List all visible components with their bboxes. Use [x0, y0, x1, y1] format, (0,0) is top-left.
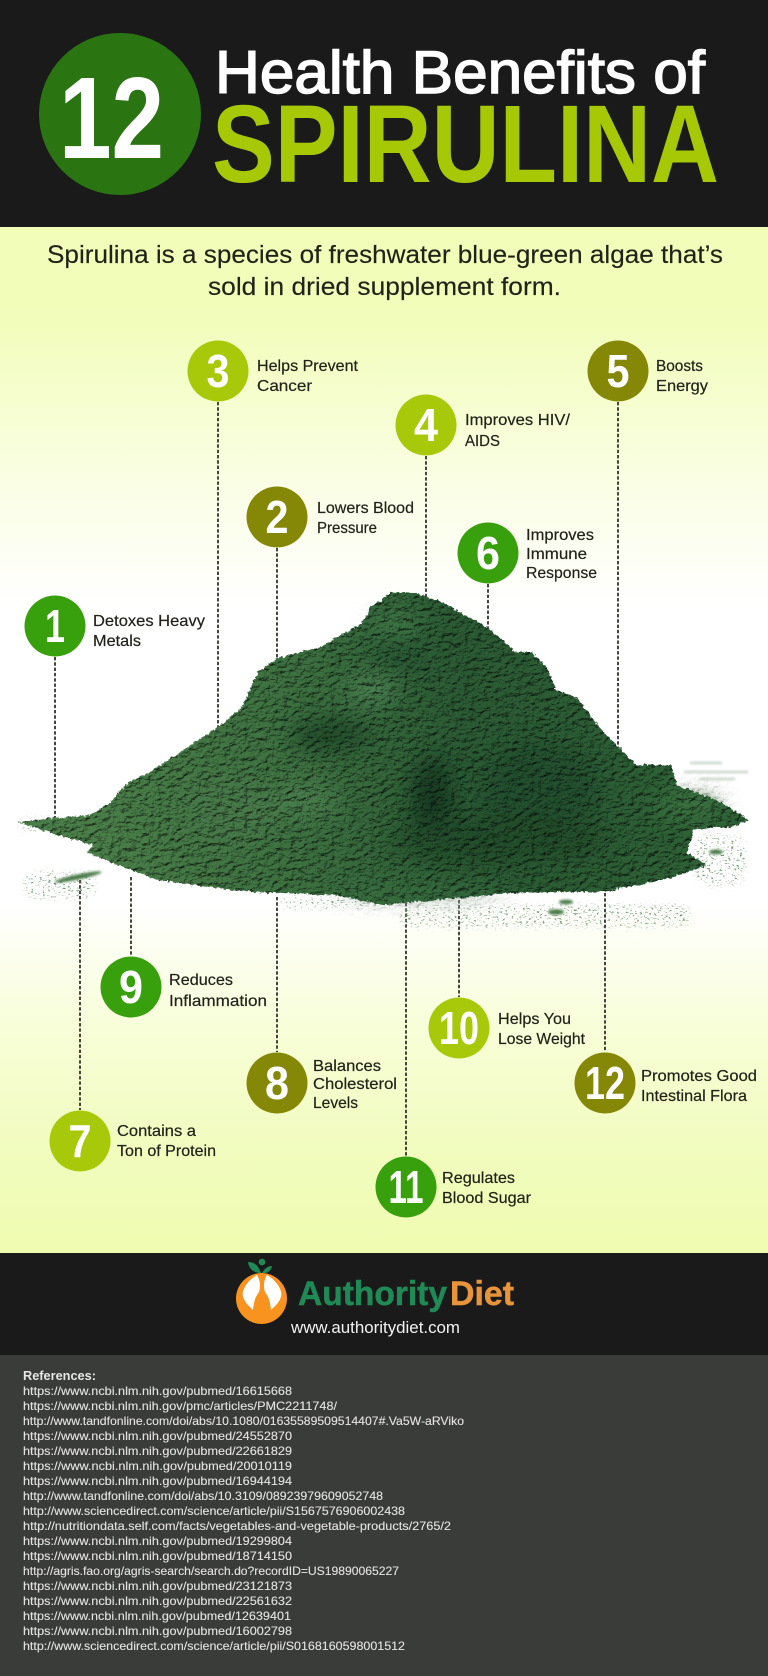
references list: https://www.ncbi.nlm.nih.gov/pubmed/16615668 — [23, 1384, 292, 1398]
logo wordmark: Authority: Authority — [298, 1275, 447, 1313]
benefit 12 — [574, 1052, 757, 1114]
references list: http://agris.fao.org/agris-search/search.do?recordID=US19890065227 — [23, 1564, 399, 1578]
benefit 9: 9 — [119, 961, 143, 1013]
benefit 6: 6 — [476, 527, 500, 579]
references list: http://www.tandfonline.com/doi/abs/10.3109/08923979609052748 — [23, 1489, 383, 1503]
benefit 5: Boosts — [656, 358, 703, 375]
benefit 4: Improves HIV/ — [465, 412, 571, 429]
intro text: sold in dried supplement form. — [208, 273, 561, 301]
benefit 11: Blood Sugar — [442, 1190, 532, 1207]
logo wordmark: Diet: Diet — [450, 1275, 514, 1313]
connector lines — [55, 402, 618, 1157]
benefit 1: Detoxes Heavy — [93, 613, 205, 630]
references list: http://www.sciencedirect.com/science/article/pii/S0168160598001512 — [23, 1639, 405, 1653]
references panel — [0, 1355, 768, 1676]
benefit 3: 3 — [206, 345, 230, 397]
benefit 3: Cancer — [257, 378, 313, 395]
benefit 8: Levels — [313, 1095, 358, 1112]
benefit 9: Reduces — [169, 972, 233, 989]
background panel — [0, 227, 768, 1253]
benefit 2 — [246, 486, 414, 548]
intro text: Spirulina is a species of freshwater blue-green algae that’s — [47, 241, 723, 269]
references list — [23, 1384, 464, 1653]
title line: Health Benefits of: Health Benefits of — [215, 39, 705, 106]
spirulina powder scatter — [20, 818, 745, 927]
badge: 12 — [39, 33, 201, 195]
benefit 9: Inflammation — [169, 993, 267, 1010]
benefit 6 — [458, 522, 597, 584]
references list: http://nutritiondata.self.com/facts/vegetables-and-vegetable-products/2765/2 — [23, 1519, 451, 1533]
benefit 6: Response — [526, 565, 597, 582]
benefit 5: 5 — [606, 345, 630, 397]
benefit 8: Balances — [313, 1058, 381, 1075]
benefit 9 — [100, 956, 267, 1018]
references list: https://www.ncbi.nlm.nih.gov/pubmed/23121873 — [23, 1579, 292, 1593]
references list: https://www.ncbi.nlm.nih.gov/pubmed/16944194 — [23, 1474, 292, 1488]
benefit 10: Lose Weight — [498, 1031, 586, 1048]
spirulina powder pile — [18, 592, 749, 905]
benefit 10: 10 — [439, 1002, 479, 1054]
header band — [0, 0, 768, 227]
benefit 12: Intestinal Flora — [641, 1088, 747, 1105]
intro text — [47, 241, 723, 301]
benefit 7 — [50, 1110, 216, 1172]
benefit 6: Improves — [526, 527, 594, 544]
benefit 4 — [396, 394, 571, 456]
benefit 1: Metals — [93, 633, 141, 650]
benefit 1 — [24, 596, 205, 656]
references list: http://www.tandfonline.com/doi/abs/10.1080/01635589509514407#.Va5W-aRViko — [23, 1414, 464, 1428]
footer band — [0, 1253, 768, 1355]
benefit 2: Lowers Blood — [317, 500, 414, 517]
references list: https://www.ncbi.nlm.nih.gov/pubmed/22661829 — [23, 1444, 292, 1458]
benefit 10 — [428, 998, 586, 1058]
references list: https://www.ncbi.nlm.nih.gov/pmc/articles/PMC2211748/ — [23, 1399, 338, 1413]
benefit 5 — [588, 340, 708, 402]
loose powder clumps — [54, 763, 748, 915]
benefit 2: 2 — [266, 491, 288, 543]
icon: Authority Diet logo — [236, 1259, 287, 1324]
website url: www.authoritydiet.com — [290, 1318, 460, 1337]
benefit 4: AIDS — [465, 433, 500, 450]
references list: https://www.ncbi.nlm.nih.gov/pubmed/18714150 — [23, 1549, 292, 1563]
benefit 4: 4 — [414, 399, 438, 451]
benefit 5: Energy — [656, 378, 708, 395]
benefit 7: Ton of Protein — [117, 1143, 216, 1160]
references heading: References: — [23, 1369, 96, 1383]
benefit 3 — [188, 340, 359, 402]
benefit 7: 7 — [68, 1115, 92, 1167]
benefit 11 — [376, 1156, 532, 1218]
references list: https://www.ncbi.nlm.nih.gov/pubmed/22561632 — [23, 1594, 292, 1608]
benefit 3: Helps Prevent — [257, 358, 359, 375]
benefit 1: 1 — [45, 600, 65, 652]
benefit 12: Promotes Good — [641, 1068, 757, 1085]
benefit 8: 8 — [265, 1057, 289, 1109]
references list: http://www.sciencedirect.com/science/article/pii/S1567576906002438 — [23, 1504, 405, 1518]
references list: https://www.ncbi.nlm.nih.gov/pubmed/24552870 — [23, 1429, 292, 1443]
benefit 7: Contains a — [117, 1123, 196, 1140]
references list: https://www.ncbi.nlm.nih.gov/pubmed/19299804 — [23, 1534, 292, 1548]
benefit 11: Regulates — [442, 1170, 515, 1187]
benefit 2: Pressure — [317, 520, 377, 537]
benefit 11: 11 — [388, 1161, 424, 1213]
benefit 12: 12 — [585, 1057, 625, 1109]
references list: https://www.ncbi.nlm.nih.gov/pubmed/12639401 — [23, 1609, 291, 1623]
references list: https://www.ncbi.nlm.nih.gov/pubmed/20010119 — [23, 1459, 292, 1473]
benefit 8: Cholesterol — [313, 1076, 397, 1093]
benefit 10: Helps You — [498, 1011, 571, 1028]
references list: https://www.ncbi.nlm.nih.gov/pubmed/16002798 — [23, 1624, 292, 1638]
benefit 8 — [246, 1052, 397, 1114]
badge: 12: 12 — [59, 53, 164, 183]
benefit 6: Immune — [526, 546, 587, 563]
